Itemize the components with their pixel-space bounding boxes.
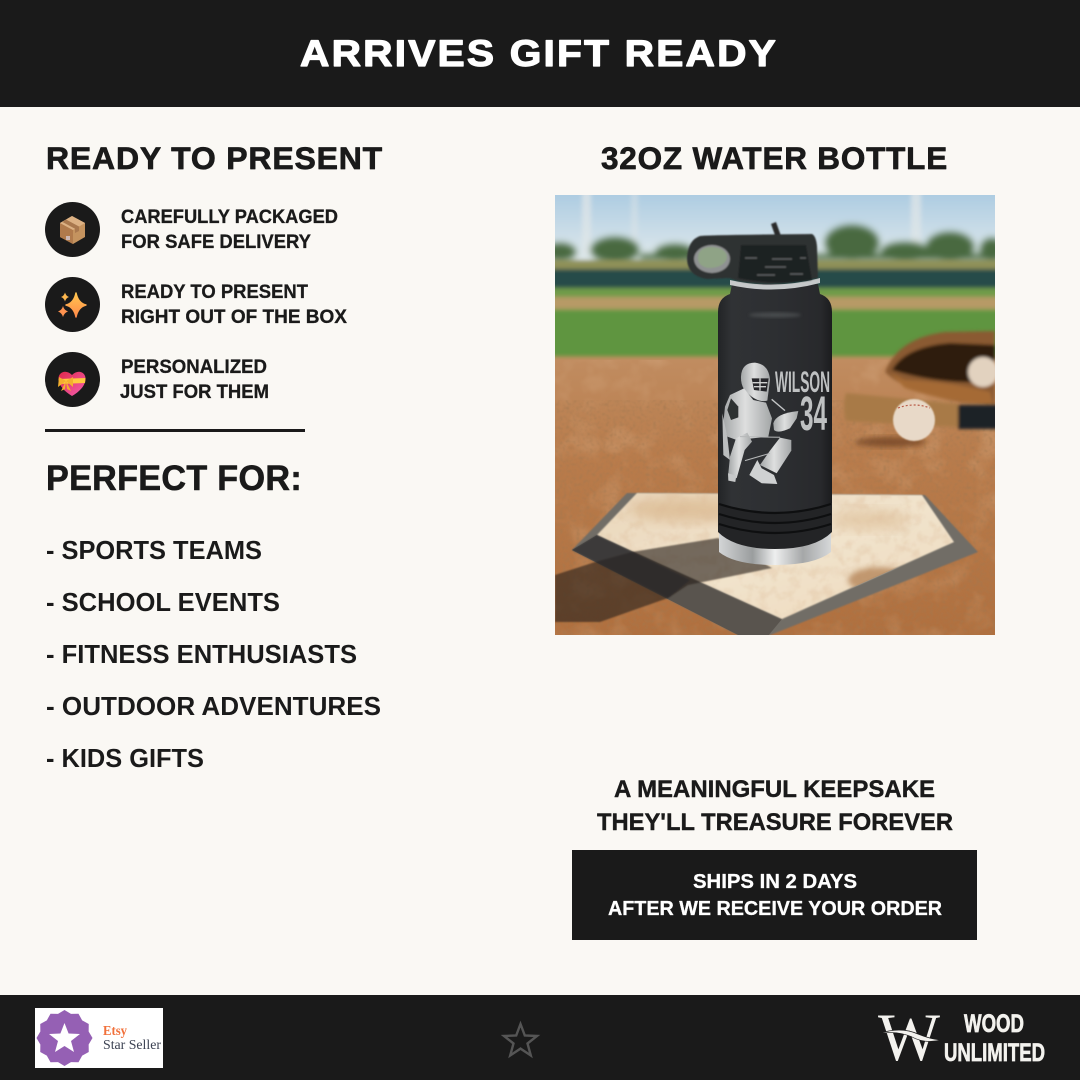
baseball bat <box>844 393 998 429</box>
baseball <box>854 399 935 447</box>
bottle lid <box>687 222 818 284</box>
feature list <box>45 202 347 407</box>
text: carefully packaged: CAREFULLY PACKAGED <box>121 206 338 228</box>
product photo <box>544 185 1005 636</box>
product photo: WILSON <box>775 366 830 399</box>
heading: ready to present: READY TO PRESENT <box>46 140 383 176</box>
list: audiences <box>46 535 381 773</box>
list: audiences: - SPORTS TEAMS <box>46 535 262 565</box>
divider <box>45 429 305 432</box>
icon: outline star <box>504 1024 537 1056</box>
shipping callout: SHIPS IN 2 DAYS <box>693 871 857 893</box>
etsy star seller badge <box>35 1008 163 1068</box>
shipping callout: AFTER WE RECEIVE YOUR ORDER <box>608 898 943 920</box>
feature: carefully packaged <box>45 202 338 257</box>
wood unlimited logo: W <box>878 999 941 1075</box>
engraving: name and number: 34 <box>800 388 827 441</box>
etsy star seller badge: Etsy <box>103 1024 127 1039</box>
engraving: name and number <box>775 371 830 430</box>
wood unlimited logo <box>878 999 1045 1075</box>
header banner <box>0 0 1080 107</box>
keepsake message: A MEANINGFUL KEEPSAKE <box>614 776 935 803</box>
icon: gift heart <box>45 352 100 407</box>
wood unlimited logo: WOOD <box>964 1010 1024 1038</box>
heading: product name: 32OZ WATER BOTTLE <box>601 140 948 176</box>
text: personalized: JUST FOR THEM <box>120 381 269 403</box>
list: audiences: - SCHOOL EVENTS <box>46 587 280 617</box>
title: ARRIVES GIFT READY <box>300 33 778 74</box>
engraving: catcher <box>722 363 798 484</box>
text: personalized: PERSONALIZED <box>121 356 267 378</box>
icon: sparkles <box>45 277 100 332</box>
feature: ready to present <box>45 277 347 332</box>
feature: personalized <box>45 352 269 407</box>
icon: package box <box>45 202 100 257</box>
text: ready to present <box>121 281 347 328</box>
footer bar <box>0 995 1080 1080</box>
wood unlimited logo: UNLIMITED <box>944 1039 1045 1067</box>
keepsake message <box>597 776 953 836</box>
baseball glove <box>885 331 998 405</box>
bottle steel base <box>719 530 831 565</box>
list: audiences: - FITNESS ENTHUSIASTS <box>46 639 357 669</box>
etsy star seller badge: Star Seller <box>103 1038 161 1053</box>
water bottle <box>687 222 832 565</box>
bottle shadow <box>555 535 772 622</box>
list: audiences: - OUTDOOR ADVENTURES <box>46 691 381 721</box>
text: ready to present: READY TO PRESENT <box>121 281 308 303</box>
text: carefully packaged: FOR SAFE DELIVERY <box>121 231 311 253</box>
heading: perfect for: PERFECT FOR: <box>46 459 302 498</box>
bottle ridges <box>718 503 832 549</box>
bottle body <box>718 284 832 530</box>
text: ready to present: RIGHT OUT OF THE BOX <box>121 306 347 328</box>
text: personalized <box>120 356 269 403</box>
photo background: field <box>544 185 1005 635</box>
steel neck ring <box>730 278 820 290</box>
home plate <box>572 493 978 636</box>
text: carefully packaged <box>121 206 338 253</box>
keepsake message: THEY'LL TREASURE FOREVER <box>597 809 953 836</box>
shipping callout <box>572 850 977 940</box>
list: audiences: - KIDS GIFTS <box>46 743 204 773</box>
